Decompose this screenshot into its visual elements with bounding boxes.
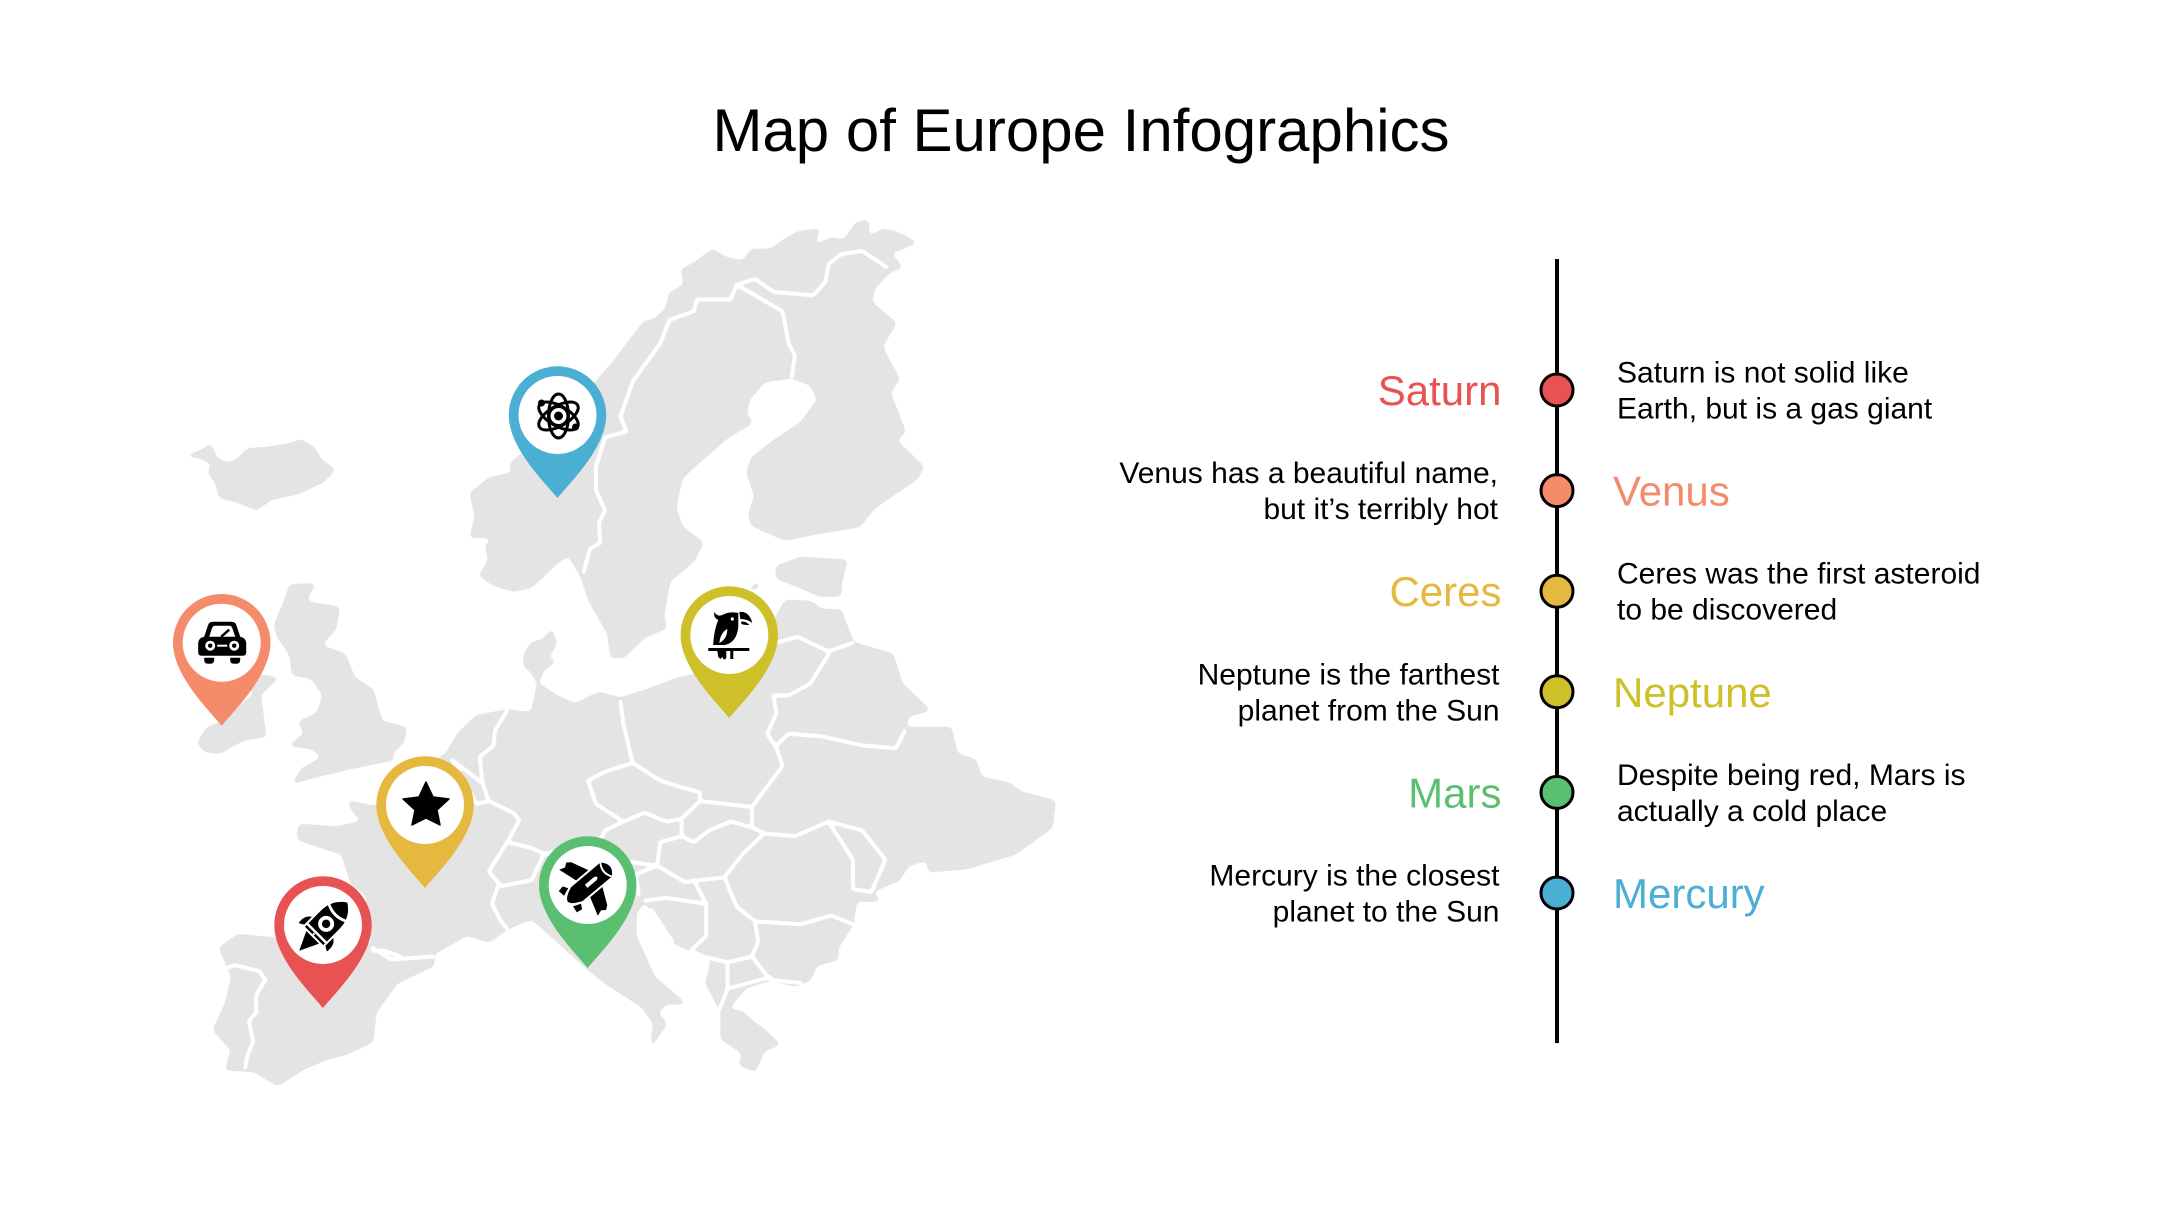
- timeline item: Ceres: Ceres was the first asteroid: [1617, 558, 1980, 591]
- pin: blue atom: [509, 366, 606, 498]
- timeline item: Neptune: planet from the Sun: [1238, 694, 1500, 727]
- timeline item: Mars: actually a cold place: [1617, 795, 1887, 828]
- icon: plane: [548, 843, 630, 925]
- timeline item: Saturn: Saturn: [1378, 367, 1502, 414]
- timeline item: Mercury: Mercury is the closest: [1209, 860, 1500, 892]
- pin: green plane: [539, 836, 636, 968]
- pin: olive parrot: [681, 586, 778, 718]
- timeline item: Neptune: [1198, 658, 1772, 727]
- icon: rocket: [285, 888, 362, 965]
- timeline item: Neptune: Neptune is the farthest: [1198, 658, 1500, 691]
- pin: red rocket: [274, 876, 372, 1008]
- timeline item: Ceres: Ceres: [1389, 568, 1502, 615]
- icon: car: [198, 622, 246, 664]
- timeline item: Ceres: [1389, 558, 1980, 627]
- timeline item: Saturn: Earth, but is a gas giant: [1617, 392, 1933, 426]
- icon: parrot: [708, 612, 752, 659]
- timeline item: Saturn: [1378, 356, 1933, 426]
- timeline item: Venus: Venus: [1613, 468, 1730, 515]
- icon: atom: [534, 394, 583, 438]
- timeline item: Mars: Despite being red, Mars is: [1617, 759, 1966, 792]
- timeline item: Mars: [1408, 759, 1966, 828]
- timeline item: Mars: Mars: [1408, 769, 1502, 816]
- timeline item: Mercury: [1209, 860, 1765, 928]
- timeline: [1119, 259, 1980, 1043]
- title: Map of Europe Infographics: [712, 97, 1450, 164]
- timeline item: Venus: Venus has a beautiful name,: [1119, 457, 1498, 490]
- timeline item: Venus: but it’s terribly hot: [1263, 493, 1499, 526]
- timeline item: Venus: [1119, 457, 1730, 526]
- pin: yellow star: [376, 756, 474, 888]
- icon: star: [403, 782, 449, 825]
- timeline item: Neptune: Neptune: [1613, 669, 1772, 716]
- country borders: [226, 251, 905, 1068]
- timeline item: Mercury: Mercury: [1613, 870, 1765, 917]
- pin: orange car: [173, 594, 270, 726]
- timeline item: Mercury: planet to the Sun: [1273, 896, 1500, 928]
- map of Europe: [188, 220, 1055, 1086]
- land masses: [188, 220, 1055, 1086]
- timeline item: Ceres: to be discovered: [1617, 594, 1837, 627]
- timeline item: Saturn: Saturn is not solid like: [1617, 356, 1909, 390]
